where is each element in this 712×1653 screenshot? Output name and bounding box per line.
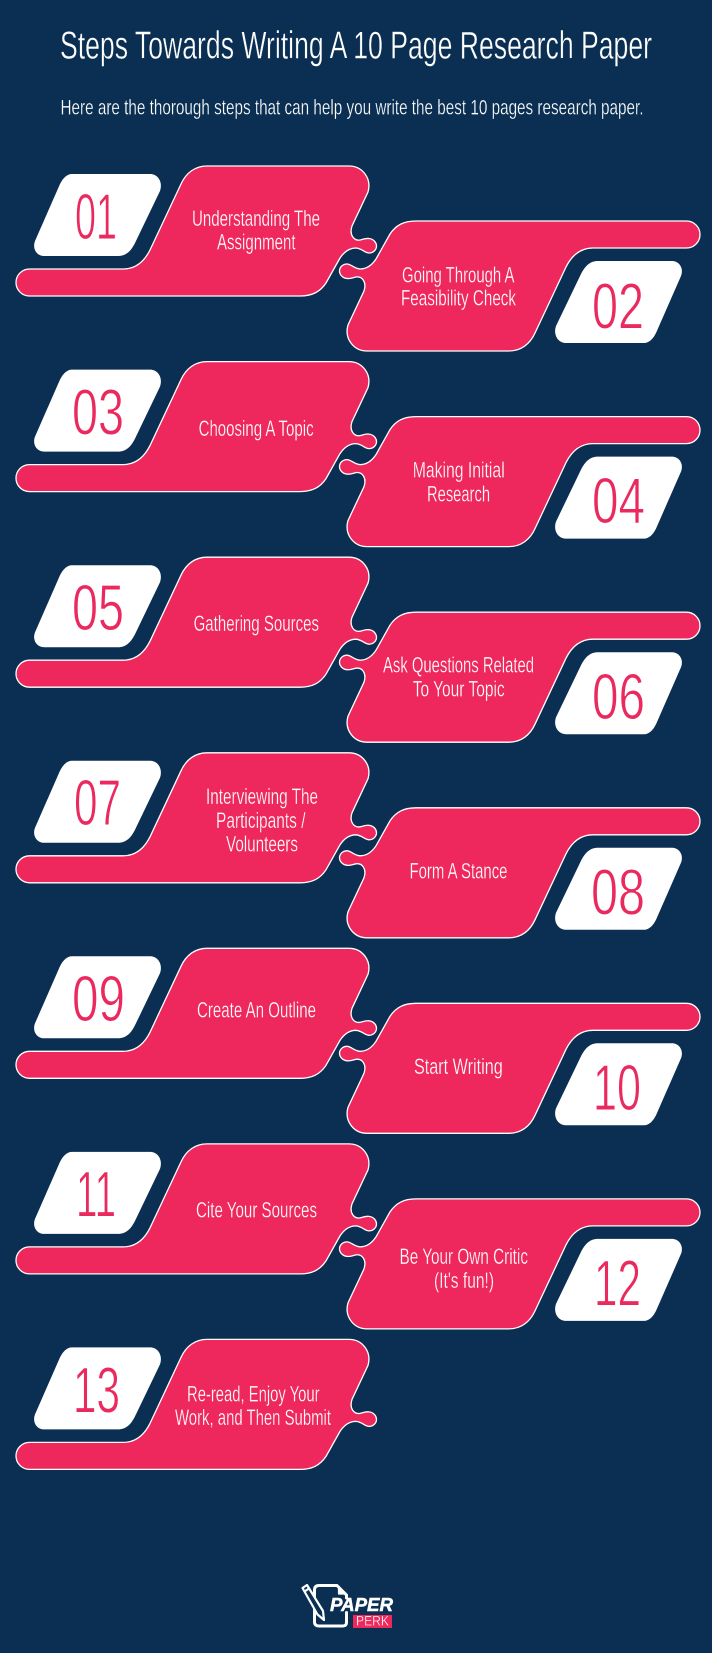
number tag 04: 04 (592, 464, 645, 537)
number tag 13 (34, 1347, 161, 1429)
panel 01 (16, 166, 376, 296)
number tag 12: 12 (594, 1247, 641, 1320)
label 06: To Your Topic (413, 677, 505, 702)
step 05 (16, 557, 376, 687)
label 04: Making Initial (413, 457, 505, 482)
number tag 02 (555, 261, 682, 343)
icon: document outline (314, 1586, 346, 1626)
number tag 08: 08 (591, 855, 645, 928)
number tag 07: 07 (74, 766, 121, 839)
number tag 12 (555, 1239, 682, 1321)
number tag 05: 05 (72, 571, 124, 644)
step 07 (16, 753, 376, 883)
number tag 11: 11 (76, 1158, 116, 1231)
step 09 (16, 948, 376, 1078)
panel 09 (16, 948, 376, 1078)
step 04 (340, 417, 700, 547)
step 13 (16, 1339, 376, 1469)
panel 13 (16, 1339, 376, 1469)
label 04: Research (427, 482, 490, 507)
label 09: Create An Outline (197, 997, 316, 1022)
number tag 01: 01 (75, 180, 117, 253)
number tag 06: 06 (592, 660, 645, 733)
panel 02 (340, 221, 700, 351)
label 07: Volunteers (226, 832, 298, 857)
number tag 03: 03 (72, 375, 124, 448)
step 06 (340, 612, 700, 742)
label 07 (206, 784, 318, 857)
step 02 (340, 221, 700, 351)
label 03: Choosing A Topic (199, 416, 314, 441)
label 10: Start Writing (414, 1054, 503, 1079)
panel 10 (340, 1003, 700, 1133)
label 06 (383, 653, 534, 702)
label 05: Gathering Sources (194, 611, 319, 636)
panel 12 (340, 1199, 700, 1329)
label 01 (192, 206, 320, 254)
number tag 04 (555, 457, 682, 539)
number tag 11 (34, 1152, 161, 1234)
number tag 08 (555, 848, 682, 930)
step 01 (16, 166, 376, 296)
number tag 01 (34, 174, 161, 256)
label 01: Assignment (217, 230, 296, 254)
number tag 03 (34, 370, 161, 452)
step 12 (340, 1199, 700, 1329)
panel 03 (16, 362, 376, 492)
label 02: Feasibility Check (401, 286, 517, 311)
number tag 13: 13 (73, 1353, 120, 1426)
label 13: Work, and Then Submit (175, 1405, 331, 1430)
panel 07 (16, 753, 376, 883)
number tag 10: 10 (593, 1051, 641, 1124)
number tag 02: 02 (592, 269, 644, 342)
panel 08 (340, 808, 700, 938)
step 08 (340, 808, 700, 938)
number tag 09 (34, 956, 161, 1038)
icon: pencil (302, 1585, 324, 1620)
label 11: Cite Your Sources (196, 1198, 317, 1223)
wordmark PERK box: PERK (356, 1612, 390, 1628)
wordmark PAPER: PAPER (330, 1595, 393, 1615)
number tag 05 (34, 565, 161, 647)
label 07: Participants / (216, 808, 306, 833)
label 07: Interviewing The (206, 784, 318, 809)
panel 04 (340, 417, 700, 547)
panel 11 (16, 1144, 376, 1274)
label 13 (175, 1381, 331, 1430)
label 12 (400, 1244, 528, 1293)
number tag 07 (34, 761, 161, 843)
step 11 (16, 1144, 376, 1274)
label 02 (401, 262, 517, 311)
label 04 (413, 457, 505, 507)
label 12: Be Your Own Critic (400, 1244, 528, 1269)
logo: Paper Perk (302, 1585, 393, 1628)
number tag 06 (555, 652, 682, 734)
label 01: Understanding The (192, 206, 320, 231)
label 12: (It's fun!) (434, 1268, 494, 1293)
step 10 (340, 1003, 700, 1133)
number tag 09: 09 (72, 962, 125, 1035)
label 13: Re-read, Enjoy Your (187, 1381, 320, 1406)
number tag 10 (555, 1043, 682, 1125)
step 03 (16, 362, 376, 492)
label 08: Form A Stance (410, 858, 508, 883)
label 06: Ask Questions Related (383, 653, 534, 678)
label 02: Going Through A (402, 262, 515, 287)
panel 06 (340, 612, 700, 742)
panel 05 (16, 557, 376, 687)
